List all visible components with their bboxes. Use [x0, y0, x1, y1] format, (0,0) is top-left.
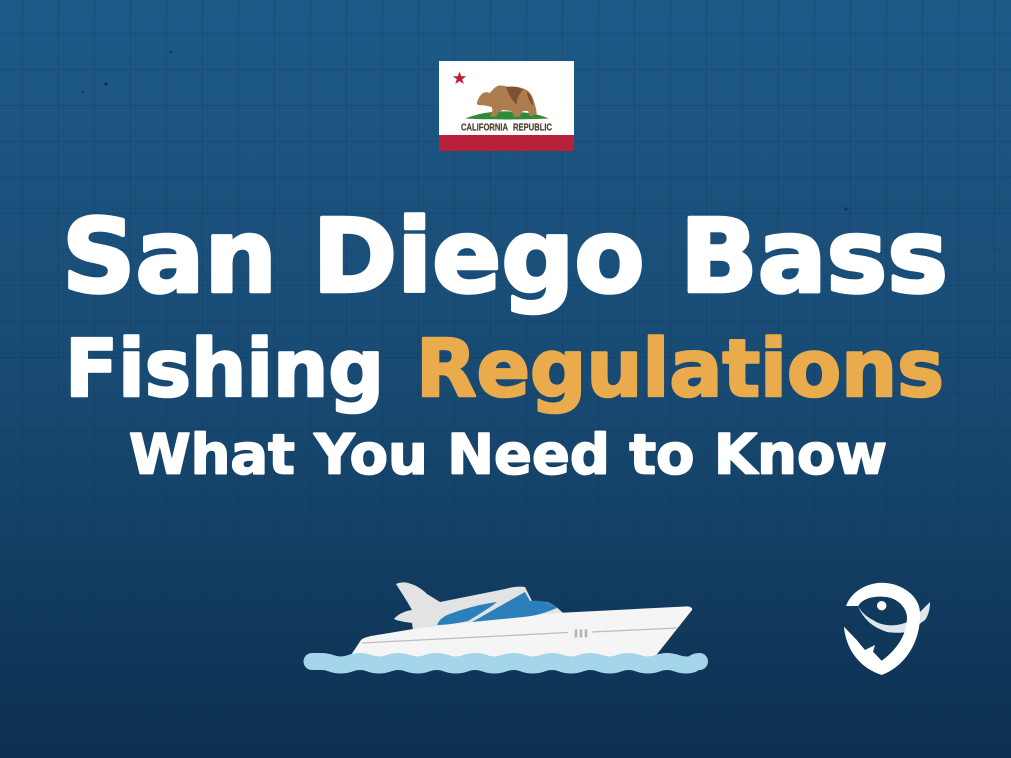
logo fish body [844, 583, 920, 675]
logo eye [877, 601, 886, 610]
icon: California flag [439, 61, 574, 151]
yacht superstructure [394, 582, 563, 630]
title: Fishing Regulations [65, 323, 944, 415]
yacht side window [437, 602, 497, 625]
flag grass [465, 111, 549, 119]
icon: fish hook logo [844, 583, 930, 675]
yacht windshield [472, 592, 557, 622]
yacht hull stripe [362, 628, 677, 643]
icon: yacht on water [312, 582, 700, 665]
flag text: CALIFORNIA REPUBLIC [461, 122, 552, 134]
word: Regulations: Regulations [416, 323, 944, 415]
flag star [453, 72, 466, 84]
logo swoosh [858, 602, 930, 633]
word: Fishing: Fishing [65, 323, 384, 415]
title: San Diego Bass: San Diego Bass [62, 198, 948, 316]
flag bear [477, 85, 537, 117]
yacht hull [349, 606, 692, 658]
yacht vents [576, 630, 586, 638]
subtitle: What You Need to Know [129, 422, 887, 486]
water [312, 662, 700, 665]
